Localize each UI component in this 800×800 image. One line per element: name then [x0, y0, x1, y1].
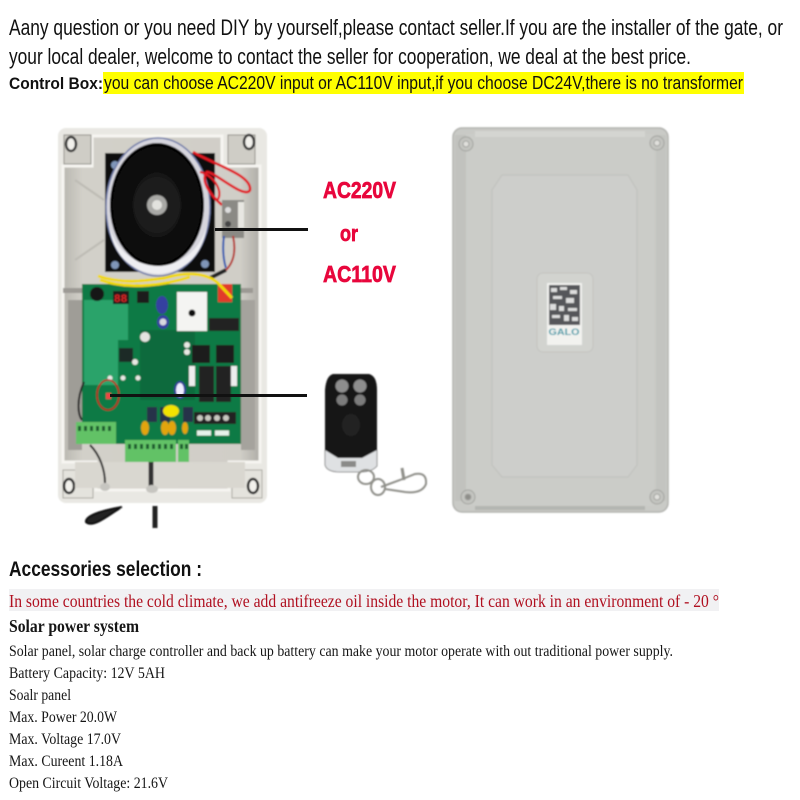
control box note: Control Box:	[9, 74, 103, 93]
circuit board	[82, 284, 241, 444]
yellow wires	[98, 274, 232, 298]
voltage label: AC220V	[323, 177, 397, 203]
battery capacity: Battery Capacity: 12V 5AH	[9, 665, 165, 682]
voltage label: or	[340, 221, 358, 246]
circuit board: 88	[114, 294, 128, 306]
QR label	[537, 273, 593, 352]
leader line: transformer	[215, 228, 308, 231]
closed box lid photo	[453, 128, 668, 512]
raised panel	[492, 175, 637, 477]
cables	[78, 382, 158, 528]
voltage label	[323, 177, 397, 287]
solar description: Solar panel, solar charge controller and back up battery can make your motor operate with out traditional power supply.	[9, 643, 673, 660]
open control box photo	[58, 128, 267, 528]
solar power system specs	[9, 616, 673, 792]
solar heading: Solar power system	[9, 616, 139, 636]
keyring	[358, 468, 426, 495]
red button marker	[97, 380, 119, 410]
accessories heading: Accessories selection :	[9, 558, 202, 581]
QR label: GALO	[548, 327, 580, 338]
max current: Max. Cureent 1.18A	[9, 753, 123, 770]
max power: Max. Power 20.0W	[9, 709, 118, 726]
green terminal blocks	[76, 422, 189, 462]
transformer	[105, 138, 215, 276]
solar panel label: Soalr panel	[9, 687, 71, 704]
open circuit voltage: Open Circuit Voltage: 21.6V	[9, 775, 168, 792]
corner screws	[459, 136, 664, 504]
enclosure shell	[58, 128, 267, 503]
header paragraph	[9, 15, 783, 69]
leader line: receiver	[110, 394, 307, 397]
red wires and connector	[193, 152, 250, 278]
max voltage: Max. Voltage 17.0V	[9, 731, 121, 748]
voltage label: AC110V	[323, 261, 397, 287]
icon: remote control	[325, 374, 426, 495]
